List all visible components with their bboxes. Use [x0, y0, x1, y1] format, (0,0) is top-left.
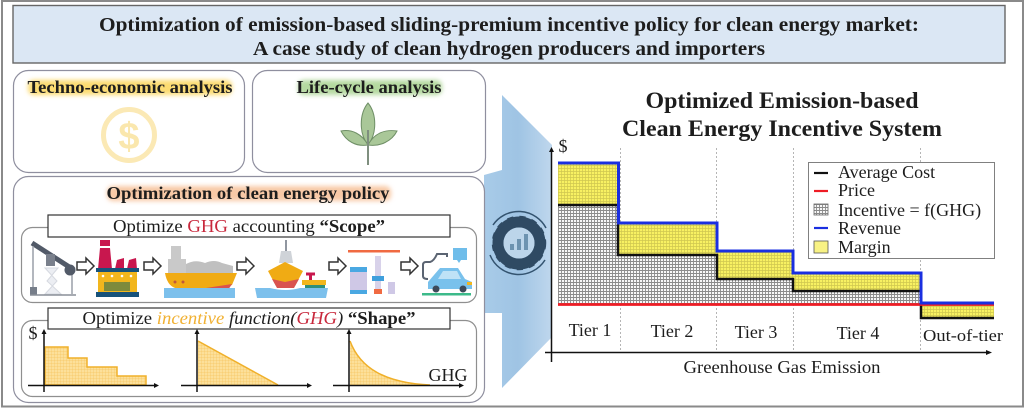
title banner: A case study of clean hydrogen producers and importers: [253, 38, 765, 60]
panel: life-cycle analysis: Life-cycle analysis: [296, 77, 442, 97]
title banner: [13, 6, 1005, 63]
panel: techno-economic analysis: [14, 70, 244, 172]
panel: GHG accounting scope: [22, 215, 476, 302]
legend: [808, 162, 994, 258]
tier labels: Tier 3: [735, 322, 777, 342]
chart: exponential incentive: [333, 329, 468, 392]
icon: pumpjack: [30, 243, 76, 295]
panel: GHG accounting scope: Optimize GHG accounting “Scope”: [113, 216, 385, 236]
y-axis unit: $: [558, 136, 568, 156]
arrow: step 1: [77, 258, 94, 274]
tier labels: Tier 4: [837, 323, 879, 343]
chart: stepped incentive: [28, 323, 159, 392]
icon: hydrogen car: [422, 248, 472, 296]
tier labels: Tier 1: [569, 320, 611, 340]
tier labels: Out-of-tier: [923, 326, 1004, 345]
arrow: step 3: [237, 258, 254, 274]
legend: Margin: [838, 237, 891, 257]
icon: dollar coin: $: [118, 116, 140, 158]
icon: hydrogen carrier ship: [164, 246, 237, 298]
arrow: step 5: [401, 258, 418, 274]
chart title: Optimized Emission-based: [646, 88, 918, 114]
chart: linear incentive: [181, 329, 312, 392]
tier labels: Tier 2: [651, 321, 693, 341]
incentive area: [558, 205, 921, 304]
panel: life-cycle analysis: [252, 70, 486, 172]
legend: Incentive = f(GHG): [838, 200, 981, 221]
panel: incentive function shape: Optimize incentive function(GHG) “Shape”: [82, 308, 416, 329]
heading: policy optimization: Optimization of clean energy policy: [106, 183, 390, 203]
panel: techno-economic analysis: Techno-economic analysis: [28, 77, 233, 97]
arrow: step 4: [329, 258, 346, 274]
tier labels: [569, 320, 1004, 345]
icon: dollar coin: [104, 110, 154, 160]
chart: emission-based incentive tiers: [545, 136, 1004, 377]
chart: exponential incentive: GHG: [428, 365, 468, 385]
x-axis label: Greenhouse Gas Emission: [684, 357, 880, 377]
icon: import ship at port: [255, 240, 328, 298]
icon: plant: [341, 103, 397, 165]
chart: stepped incentive: $: [28, 323, 38, 343]
title banner: Optimization of emission-based sliding-premium incentive policy for clean energy market:: [99, 14, 919, 36]
icon: refinery factory: [96, 240, 139, 297]
price line: [558, 303, 994, 306]
legend: Price: [838, 180, 875, 200]
tier dividers: [620, 148, 920, 350]
margin areas: [558, 163, 994, 318]
legend: Average Cost: [838, 162, 935, 182]
chart title: Clean Energy Incentive System: [622, 116, 942, 142]
icon: hydrogen station: [348, 250, 400, 294]
average cost line: [558, 205, 994, 318]
panel: incentive function shape: [22, 308, 476, 396]
panel: optimization of clean energy policy: [14, 176, 484, 402]
revenue line: [558, 163, 994, 303]
chart title: [622, 88, 942, 142]
arrow: step 2: [144, 258, 161, 274]
legend: Revenue: [838, 218, 901, 238]
icon: gear with bar chart: [490, 211, 546, 274]
axes: [545, 150, 990, 362]
arrow: analysis to incentive system: [484, 95, 552, 388]
